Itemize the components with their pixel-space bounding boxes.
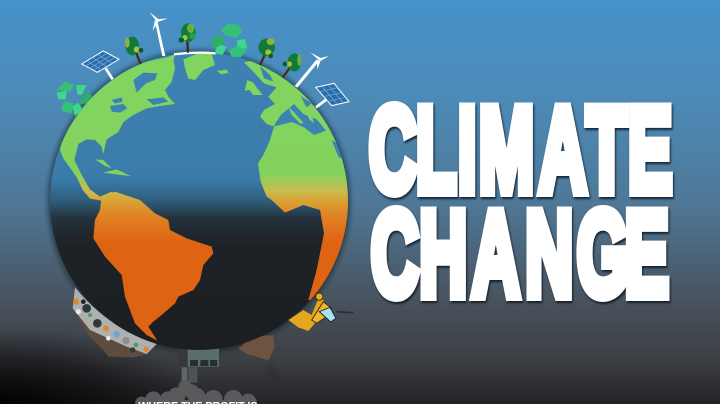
icon: tree 3 <box>258 38 275 65</box>
title line: CHANGE: CHANGE <box>371 186 669 321</box>
icon: wind turbine left <box>149 12 168 56</box>
smoke cloud <box>135 380 257 404</box>
icon: tree 1 <box>125 37 143 64</box>
globe sphere <box>50 52 348 350</box>
icon: solar panel right <box>316 83 349 107</box>
icon: dirt mound left <box>77 317 148 357</box>
globe illustration <box>47 12 357 404</box>
land: Greenland <box>183 54 215 80</box>
title line: CLIMATE: CLIMATE <box>369 82 672 217</box>
icon: wind turbine right <box>295 52 329 88</box>
land: North and Central America <box>60 54 175 201</box>
top highlight arc <box>174 53 216 54</box>
icon: factory <box>178 348 219 383</box>
sea: Great Lakes <box>110 97 168 113</box>
icon: tree 4 <box>283 53 301 78</box>
landfill band <box>73 287 157 354</box>
globe shadow <box>47 50 351 353</box>
land: Iceland <box>217 70 229 74</box>
bottom-left vignette <box>0 250 420 404</box>
land: Caribbean islands <box>95 159 131 176</box>
sea: Mediterranean <box>273 104 326 135</box>
icon: excavator <box>288 293 353 331</box>
land: Italy and Balkans <box>289 108 314 124</box>
icon: tree 2 <box>179 23 196 53</box>
icon: recycling symbol top <box>212 23 247 57</box>
icon: solar panel left <box>82 51 119 79</box>
sea: Hudson Bay <box>133 73 157 93</box>
main title <box>369 82 672 321</box>
smoke streak <box>267 362 280 388</box>
land: Eurasia and Africa <box>244 57 357 300</box>
icon: recycling symbol left <box>56 82 92 116</box>
land: South America <box>93 192 213 341</box>
continents <box>60 54 357 341</box>
land: Britain <box>245 80 263 95</box>
icon: dirt mound right <box>238 335 275 361</box>
sea: Baltic and Black Sea <box>260 66 344 160</box>
